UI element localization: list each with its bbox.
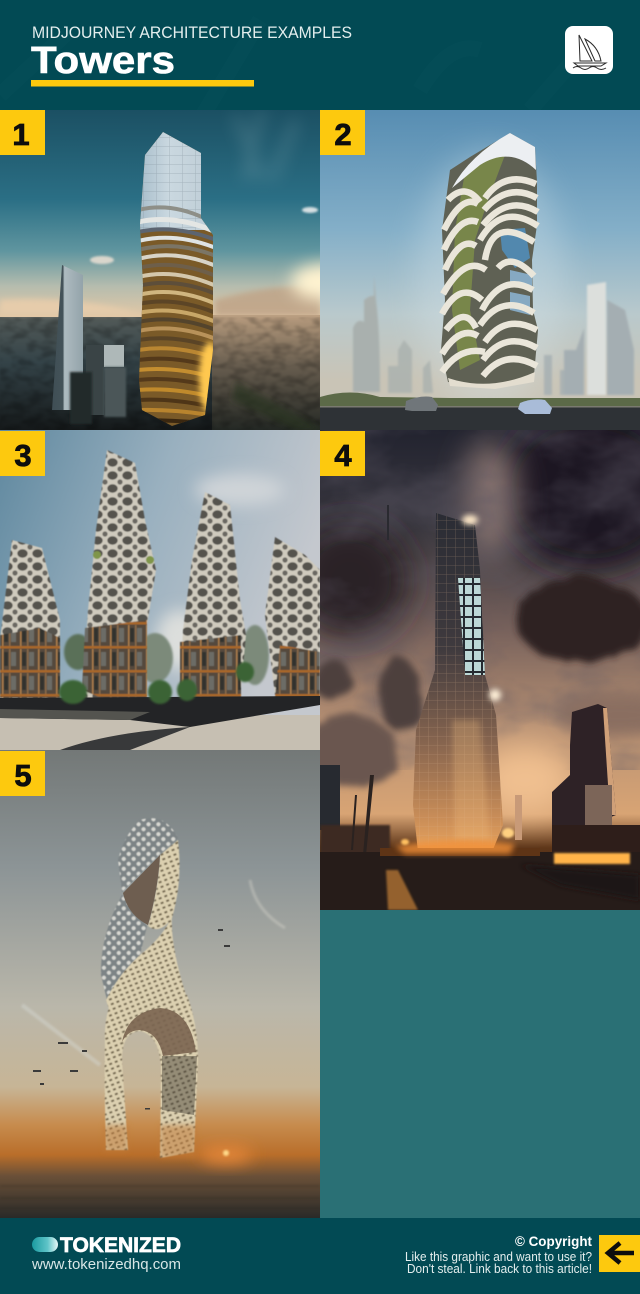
main skyscraper [413, 513, 503, 852]
ground and road [320, 392, 640, 430]
panel: image 4 stormy skyscraper [320, 430, 640, 910]
copyright notice: © Copyright [515, 1234, 592, 1249]
copyright notice: Don't steal. Link back to this article! [407, 1262, 592, 1276]
tower D [265, 537, 320, 698]
website: www.tokenizedhq.com [31, 1256, 181, 1273]
header background [0, 0, 640, 120]
icon: Tokenized pill logo [32, 1237, 58, 1252]
arch underside [122, 1008, 196, 1056]
tower B [82, 450, 156, 702]
panel: image 3 honeycomb towers [0, 430, 320, 750]
footer brand [31, 1234, 181, 1273]
footer background [0, 1218, 640, 1294]
title underline [31, 80, 254, 86]
copyright notice: Like this graphic and want to use it? [405, 1250, 592, 1264]
leaf opening [123, 855, 160, 925]
title: Towers [31, 40, 175, 82]
back arrow button [599, 1235, 640, 1272]
city right [212, 315, 320, 430]
cars [405, 396, 552, 414]
organic tower body [441, 133, 538, 389]
brand name: TOKENIZED [60, 1234, 181, 1257]
birds [33, 929, 230, 1110]
panel: image 1 tower at sunset [0, 110, 320, 430]
number badge 2 [320, 110, 365, 155]
icon: Midjourney sailboat logo [565, 26, 613, 74]
heading block [31, 24, 352, 86]
background buildings [320, 505, 522, 855]
number badge 5 [0, 751, 45, 796]
right building [552, 704, 640, 855]
tower C [180, 492, 246, 700]
panel: empty teal fill [320, 910, 640, 1218]
panel: image 2 organic green tower [320, 110, 640, 430]
road [0, 696, 320, 750]
skyline left [353, 275, 433, 393]
number badge 2: 2 [334, 117, 352, 152]
background trees [64, 625, 269, 685]
number badge 5: 5 [14, 758, 32, 793]
lattice back shell [101, 818, 178, 1000]
number badge 3: 3 [14, 438, 32, 473]
side tower [52, 265, 126, 424]
skyline right [544, 282, 634, 395]
foreground shrubs [59, 662, 254, 704]
storm clouds [290, 410, 640, 816]
city left [0, 317, 215, 430]
ground with lights [320, 828, 640, 910]
panel: image 5 twisted lattice tower over the sea [0, 750, 320, 1218]
number badge 4: 4 [334, 438, 352, 473]
number badge 1 [0, 110, 45, 155]
tower A [0, 540, 60, 700]
number badge 4 [320, 431, 365, 476]
sea [0, 1186, 320, 1208]
eyebrow text: MIDJOURNEY ARCHITECTURE EXAMPLES [32, 24, 352, 42]
copyright notice [405, 1234, 592, 1276]
number badge 1: 1 [12, 117, 30, 152]
main tower [139, 132, 213, 426]
lattice front body [105, 840, 198, 1158]
number badge 3 [0, 431, 45, 476]
